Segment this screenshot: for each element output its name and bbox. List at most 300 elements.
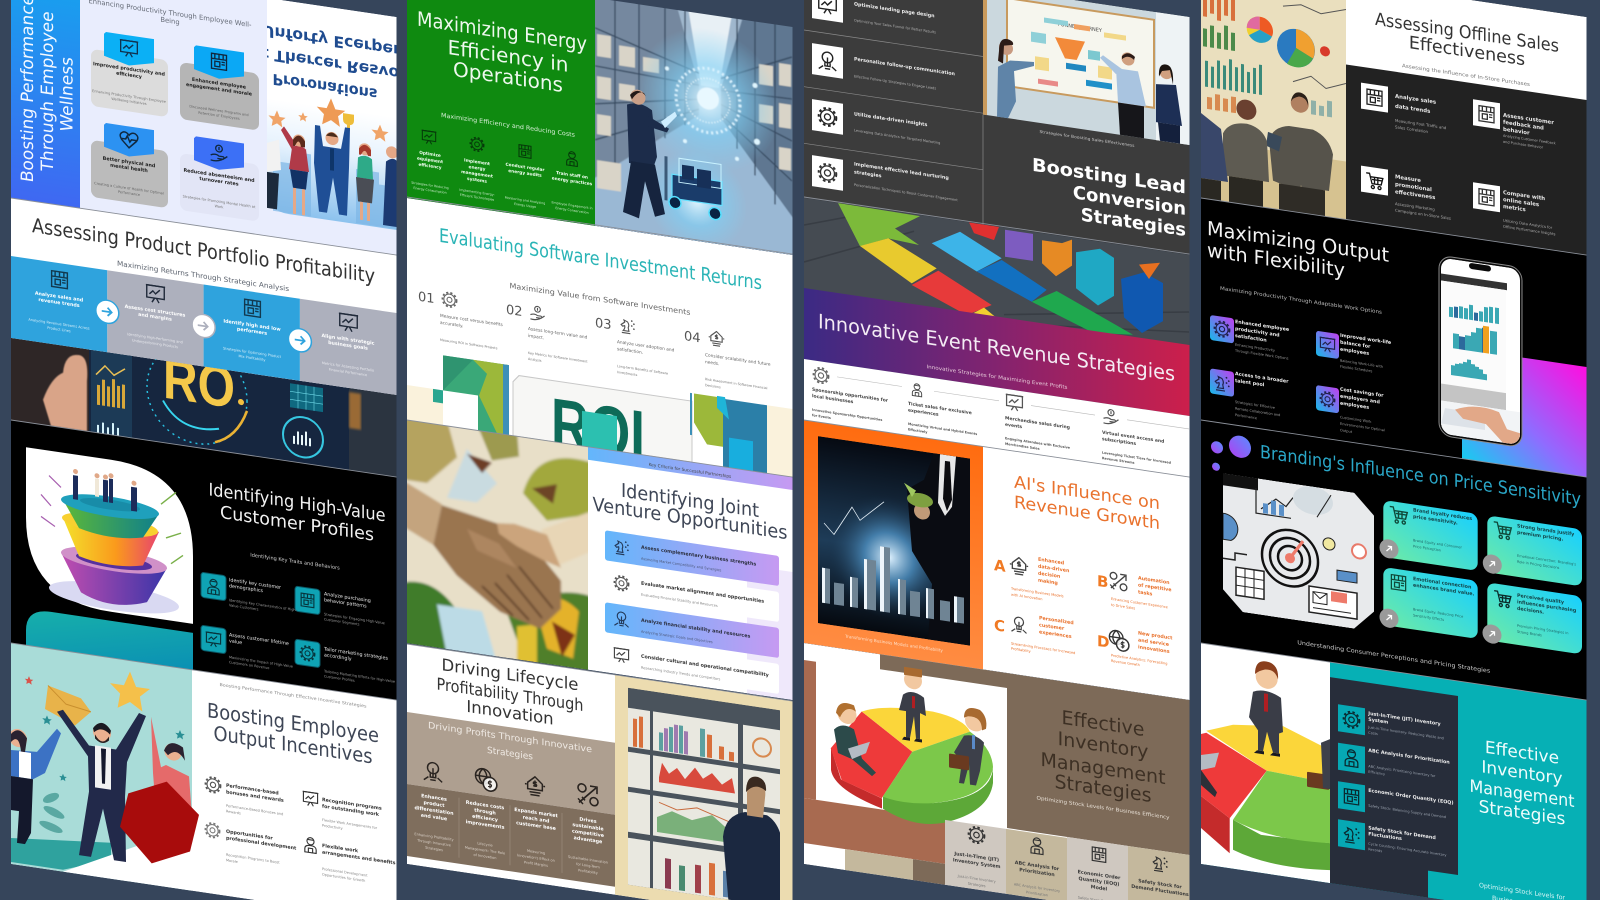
band: driving profits: reach and [523, 815, 550, 825]
slide: evaluating software investment returns [407, 198, 793, 497]
row: revenue ideas: Innovative Sponsorship Opportunities [812, 408, 882, 422]
illustration: man standing on pie chart [1201, 643, 1330, 883]
cards: inventory methods: Strategies [968, 882, 986, 888]
cream frame [615, 675, 792, 900]
row: revenue ideas: experiences [908, 407, 939, 418]
list: incentives: Opportunities for [226, 830, 273, 842]
top gradient strip: Key Criteria for Successful Partnerships [649, 462, 731, 479]
cards: branding effects: Emotional connection [1413, 577, 1471, 591]
band: driving profits: efficiency [472, 814, 499, 824]
title panel: Through Employee [38, 10, 58, 174]
band: driving profits: Drives [579, 818, 597, 825]
list: customer traits: Customer Profiles [324, 674, 355, 683]
title band [804, 288, 1190, 416]
list: flexibility benefits [1210, 313, 1392, 440]
list: flexibility benefits: Strategies for Effective [1235, 400, 1275, 410]
slide: innovative event revenue strategies [804, 197, 1190, 477]
band: driving profits: Innovation's Effect on [517, 853, 555, 863]
row: revenue ideas: events [1005, 422, 1022, 430]
green panel: Strategies for Reducing [411, 181, 449, 190]
list: customer traits: Strategies for Engaging High-Value [324, 612, 385, 625]
list: flexibility benefits: Through Flexible Work Options [1234, 349, 1289, 361]
subtitle: Boosting Performance Through Effective Incentive Strategies [220, 682, 366, 709]
dark list panel: ABC Analysis: Prioritizing Inventory for [1368, 764, 1435, 778]
slide: AI's influence on revenue growth [804, 420, 1190, 700]
subtitle: Being [160, 16, 180, 26]
numbered list: impact. [528, 333, 544, 341]
four-step band: business goals [328, 340, 368, 352]
row: revenue ideas: Merchandise Sales [1005, 442, 1040, 451]
title panel: Wellness [58, 55, 77, 133]
band: driving profits: Lifecycle [477, 841, 493, 848]
lettered list: C [994, 616, 1005, 636]
card: enhanced engagement: Enhanced employee [192, 78, 246, 91]
list: conversion tactics: Implement effective lead nurturing [854, 162, 949, 181]
dark list panel: Efficiency [1368, 770, 1385, 776]
caption: Understanding Consumer Perceptions and Pricing Strategies [1297, 640, 1490, 675]
list: customer traits: value [229, 638, 242, 646]
dark list panel: Cycle Counting: Ensuring Accurate Inventory [1368, 842, 1446, 857]
band: driving profits: Profit Margins [524, 860, 548, 868]
list: offline metrics: behavior [1503, 127, 1530, 137]
title: Boosting Lead [1032, 155, 1186, 199]
cards: branding effects: Brand Equity: Reducing Price [1413, 607, 1463, 619]
cards: inventory methods: Model [1091, 884, 1108, 893]
numbered list: needs. [705, 359, 719, 367]
list: offline metrics: Analyze sales [1395, 94, 1436, 106]
card: reduced dissatisfaction: Strategies for Promoting Mental Health at [183, 194, 255, 209]
list: offline metrics: Compare with [1503, 190, 1545, 202]
list: offline metrics: feedback and [1503, 120, 1544, 132]
list: offline metrics: metrics [1503, 204, 1526, 213]
white title header: Effectiveness [1409, 33, 1525, 70]
list: offline metrics: Campaigns on In-Store Sales [1395, 208, 1451, 221]
four-step band: Analyze sales and [35, 292, 83, 304]
criteria list: Assessing Market Compatibility and Synergies [641, 557, 722, 573]
list: conversion tactics: Optimize landing page design [854, 1, 935, 19]
photo: goal arrows on a floor [804, 197, 1190, 348]
list: flexibility benefits: employees [1340, 401, 1369, 411]
list: flexibility benefits: talent pool [1235, 378, 1265, 388]
slide: driving lifecycle profitability: Innovation [466, 697, 554, 729]
row: revenue ideas: Effectively [908, 427, 928, 434]
numbered list: Key Metrics for Software Investment [528, 351, 588, 364]
photo: handshake over a world map [407, 420, 588, 670]
slide: assessing offline sales effectiveness [1201, 0, 1586, 255]
numbered list: Assess long-term value and [528, 327, 587, 341]
list: conversion tactics: Effective Follow-Up Strategies to Engage Leads [854, 74, 936, 91]
white title header: Assessing the Influence of In-Store Purchases [1402, 63, 1530, 88]
list: offline metrics: Analyzing Customer Feedback [1503, 134, 1556, 145]
dark list panel: Economic Order Quantity (EOQ) [1368, 788, 1454, 806]
white title header: Assessing Offline Sales [1375, 10, 1559, 57]
dark list panel: Just-in-Time (JIT) Inventory [1368, 712, 1441, 727]
list: offline metrics: Utilizing Data Analytics for [1503, 219, 1552, 230]
list: incentives: Morale [226, 858, 238, 864]
list: customer traits: Tailor marketing strategies [324, 647, 388, 662]
band: driving profits: Strategies [487, 746, 533, 763]
list: flexibility benefits: Enhancing Productivity [1235, 343, 1275, 353]
green panel: Monitoring and Analyzing [505, 195, 545, 205]
list: incentives: Recognition programs [322, 798, 382, 812]
numbered list: Analyze user adoption and [617, 340, 674, 354]
title band: Innovative Event Revenue Strategies [818, 309, 1175, 386]
list: customer traits: Assess customer lifetime [229, 633, 289, 647]
list: offline metrics: Offline Performance Insights [1503, 225, 1555, 236]
band: driving profits: sustainable [572, 822, 604, 833]
brown title panel: Effective [1062, 706, 1144, 741]
four-step band: Product Lines [47, 326, 71, 333]
green panel: Operations [453, 57, 563, 97]
four-step band: Assess cost structures [125, 305, 185, 319]
slide: effective inventory management strategies (teal): Strategies [1479, 797, 1565, 830]
list: conversion tactics [804, 0, 983, 224]
list: customer traits: Identify key customer [229, 578, 281, 591]
cards: branding effects: Strong Brands [1517, 630, 1542, 637]
list: flexibility benefits: Customizing Work [1340, 415, 1371, 424]
slide: boosting employee output incentives [9, 643, 396, 900]
criteria list: Analyze financial stability and resources [641, 618, 751, 640]
row: revenue ideas: Merchandise sales during [1005, 416, 1070, 431]
photo: ROI dashboard: RO [163, 346, 235, 421]
lettered list: D [1097, 632, 1109, 652]
numbered list: Measure cost versus benefits [440, 314, 503, 328]
card: better health [91, 121, 168, 208]
numbered list: Investments [617, 370, 638, 377]
flipped title panel: Unforty Ecerpen [262, 21, 404, 60]
leaf illustration: layered funnel [26, 447, 193, 624]
list: flexibility benefits: balance for [1340, 340, 1371, 350]
numbered list: Measuring ROI in Software Projects [440, 338, 498, 350]
list: conversion tactics: strategies [854, 169, 882, 179]
numbered list: Long-term Benefits of Software [617, 364, 668, 376]
subtitle: Maximizing Value from Software Investments [509, 281, 691, 317]
numbered list: 01 [418, 290, 435, 307]
lettered list: New product [1138, 631, 1172, 642]
row: revenue ideas: Virtual event access and [1102, 431, 1164, 445]
slide: assessing product portfolio profitability [11, 198, 397, 477]
list: customer traits: demographics [229, 583, 264, 594]
list: offline metrics: Measure [1395, 174, 1421, 184]
slide: effective inventory management strategies (brown) [804, 643, 1190, 900]
criteria list: Consider cultural and operational compatibility [641, 654, 770, 679]
green panel: energy [469, 164, 486, 173]
criteria list: Assess complementary business strengths [641, 545, 756, 568]
illustration: team with star and hexagon [9, 643, 199, 892]
list: incentives: Performance-Based Bonuses and [226, 804, 283, 816]
illustration: ROI document: ROI [551, 383, 645, 475]
slide: driving lifecycle profitability [407, 644, 792, 900]
list: incentives: professional development [226, 835, 297, 852]
dark list panel: Safety Stock for Demand [1368, 826, 1436, 841]
brown title panel: Inventory [1058, 727, 1148, 763]
green panel: energy practices [552, 175, 593, 187]
green panel: efficiency [418, 162, 442, 171]
row: revenue ideas: Sponsorship opportunities for [812, 388, 888, 404]
band: driving profits: Expands market [514, 808, 558, 819]
card: better health: Better physical and [103, 157, 155, 169]
flipped title panel: t Thercer Resvoi [261, 44, 405, 83]
band: driving profits: Driving Profits Through Innovative [428, 721, 592, 755]
list: flexibility benefits: satisfaction [1235, 333, 1267, 344]
list: offline metrics: Assess customer [1503, 113, 1554, 126]
subtitle: Maximizing Productivity Through Adaptable Work Options [1220, 286, 1382, 316]
row: revenue ideas: Revenue Streams [1102, 456, 1135, 465]
cards: inventory methods: Inventory System [953, 857, 1001, 870]
list: flexibility benefits: Improved work-life [1340, 334, 1391, 346]
green panel: energy audits [508, 168, 542, 179]
numbered list: Decisions [705, 383, 721, 389]
lettered list [994, 550, 1173, 675]
list: flexibility benefits: Environments for Optimal [1340, 422, 1385, 432]
row: revenue ideas: Leveraging Ticket Tiers for Increased [1102, 451, 1171, 465]
illustration: ROI document [407, 355, 792, 476]
lettered list: Enhancing Customer Experience [1111, 597, 1168, 609]
column 4 of slides [1201, 0, 1586, 900]
list: flexibility benefits: Output [1340, 428, 1353, 434]
four-step band: Mix Profitability [239, 354, 265, 362]
cards: inventory methods: ABC Analysis for [1015, 861, 1059, 872]
lettered list: and service [1138, 637, 1170, 648]
numbered list: 04 [684, 329, 701, 346]
dark list panel: ABC Analysis for Prioritization [1368, 748, 1450, 766]
list: offline metrics: and Purchase Behavior [1503, 140, 1544, 150]
band: driving profits: differentiation [415, 805, 454, 817]
criteria list: Analyzing Strategic Goals and Objectives [641, 630, 713, 644]
slide: identifying high-value customer profiles [11, 420, 396, 702]
card: reduced dissatisfaction [182, 136, 256, 208]
lettered list: B [1097, 572, 1108, 592]
band: driving profits: product [423, 800, 445, 809]
arrow circles [96, 299, 311, 353]
lettered list: of repetitive [1138, 582, 1172, 593]
green panel: Energy Conservation [555, 206, 589, 215]
list: customer traits: Value Customers [229, 603, 259, 612]
cards: branding effects: Price Perception [1413, 544, 1441, 553]
list: flexibility benefits: Flexible Schedules [1340, 365, 1372, 373]
cards: inventory methods: Economic Order [1078, 870, 1120, 882]
list: customer traits: Maximizing the Impact of High-Value [229, 655, 293, 669]
slide: effective inventory management strategies (teal) [1201, 643, 1586, 900]
band: driving profits: Enhances [421, 794, 447, 803]
slide: boosting employee output incentives: Output Incentives [214, 721, 373, 768]
list: incentives: bonuses and rewards [226, 789, 284, 804]
list: flexibility benefits: Enhanced employee [1235, 320, 1289, 333]
column 3 of slides [804, 0, 1190, 900]
band: driving profits: improvements [466, 819, 505, 831]
card: better health: mental health [110, 163, 148, 174]
list: incentives: Performance-based [226, 784, 279, 797]
slide: identifying joint venture opportunities: Venture Opportunities [593, 493, 788, 544]
card: improved productivity: efficiency [116, 71, 143, 80]
photo: team at funnel whiteboard [983, 0, 1190, 145]
title band: Innovative Strategies for Maximizing Event Profits [926, 364, 1068, 391]
cards: branding effects: Premium Pricing Strategies in [1517, 624, 1568, 635]
lettered list: data-driven [1038, 564, 1070, 574]
band: driving profits: for Long-Term [576, 862, 600, 870]
four-step band: Metrics for Assessing Portfolio [322, 361, 374, 373]
card: enhanced engagement: Discussed Wellness Programs and [189, 104, 249, 117]
list: customer traits: Customer Segments [324, 617, 360, 627]
list: customer traits [201, 572, 395, 689]
list: conversion tactics: Personalization Techniques to Boost Customer Engagement [854, 183, 958, 202]
lettered list: Transforming Business Models [1011, 587, 1064, 598]
list: incentives [205, 776, 396, 887]
list: offline metrics: Assessing Marketing [1395, 201, 1435, 212]
teal shape [26, 608, 193, 672]
slide: maximizing output with flexibility: with Flexibility [1207, 239, 1345, 282]
numbered list: Analysis [528, 357, 542, 363]
green panel: Maximizing Energy [417, 7, 587, 56]
title: Maximizing Output [1207, 217, 1389, 267]
row: revenue ideas: Monetizing Virtual and Hybrid Events [908, 422, 977, 436]
title: Assessing Product Portfolio Profitability [32, 213, 375, 288]
lettered list: with AI Innovation [1011, 593, 1042, 601]
list: incentives: Rewards [226, 809, 241, 816]
list: offline metrics [1361, 83, 1557, 237]
photo: analyst viewing dashboards [628, 688, 783, 900]
dark list panel: Safety Stock: Balancing Supply and Demand [1368, 804, 1446, 819]
subtitle: Maximizing Returns Through Strategic Analysis [117, 259, 289, 293]
title: Identifying High-Value [208, 480, 385, 526]
band: driving profits: Management: The Role [465, 846, 505, 856]
column 2 of slides [401, 0, 802, 900]
cards: inventory methods: Safety Stock for [1138, 879, 1182, 891]
four-step band: Analyzing Revenue Streams Across [28, 318, 90, 331]
lettered list: Streamlining Processes for Increased [1011, 642, 1075, 655]
photo: smart warehouse [595, 0, 792, 255]
band: driving profits: Strategies [425, 846, 443, 852]
criteria list: Evaluating Financial Stability and Resources [641, 593, 718, 608]
lettered list: making [1038, 578, 1058, 587]
dark list panel: Records [1368, 847, 1382, 853]
cards: branding effects: Brand loyalty reduces [1413, 508, 1472, 522]
row: revenue ideas: subscriptions [1102, 436, 1136, 447]
green panel: Implement [464, 158, 490, 167]
card: improved productivity: Wellbeing Initiatives [111, 97, 147, 106]
green panel: Energy Usage [514, 202, 536, 209]
cards: inventory methods: Prioritization [1019, 867, 1055, 878]
list: offline metrics: online sales [1503, 197, 1539, 208]
four-step band: Identifying High-Performing and [127, 332, 183, 344]
gradient panel [1462, 349, 1586, 477]
slide: driving lifecycle profitability: Profitability Through [436, 674, 584, 715]
four-step band: revenue trends [38, 297, 80, 309]
photo: team reviewing charts [1201, 0, 1346, 219]
numbered list: Consider scalability and future [705, 353, 771, 368]
green panel: Conduct regular [506, 163, 544, 173]
band: driving profits: advantage [574, 835, 603, 846]
four-step band: Underperforming Products [132, 338, 178, 349]
lettered list: Predictive Analytics: Forecasting [1111, 653, 1167, 666]
slide: boosting performance through employee wellness [11, 0, 405, 256]
title: Evaluating Software Investment Returns [439, 224, 762, 295]
list: flexibility benefits: Access to a broader [1235, 372, 1288, 385]
four-step band [11, 256, 396, 395]
four-step band: Align with strategic [321, 334, 375, 347]
decorative dots [1211, 431, 1251, 476]
green panel: equipment [417, 155, 443, 165]
list: incentives: Productivity [322, 824, 343, 831]
lettered list: A [994, 556, 1006, 576]
green panel: Implementing Energy- [459, 188, 495, 197]
four-step band: Strategies for Optimizing Product [223, 346, 281, 359]
numbered list [418, 292, 770, 390]
photo: marketing icon sketches [1223, 473, 1374, 632]
list: incentives: for outstanding work [322, 804, 380, 818]
list: offline metrics: promotional [1395, 182, 1432, 193]
cards: inventory methods: Quantity (EOQ) [1079, 876, 1119, 888]
cards: branding effects: price sensitivity. [1413, 514, 1458, 526]
card: better health: Performance [118, 190, 140, 197]
cards: inventory methods: Demand Fluctuations [1131, 884, 1189, 898]
card: enhanced engagement [180, 43, 259, 131]
list: incentives: Flexible work [322, 844, 358, 854]
brown title panel: Optimizing Stock Levels for Business Efficiency [1037, 795, 1170, 821]
list: offline metrics: Measuring Foot Traffic and [1395, 118, 1446, 130]
title: Identifying Joint [621, 479, 759, 522]
list: incentives: Flexible Work Arrangements for [322, 818, 377, 830]
decorative blocks [804, 660, 945, 885]
list: customer traits: accordingly [324, 652, 352, 662]
card: enhanced engagement: engagement and morale [186, 82, 253, 98]
cards: branding effects: premium pricing. [1517, 530, 1563, 543]
subtitle: Identifying Key Traits and Behaviors [250, 552, 340, 572]
list: customer traits: Tailoring Marketing Efforts for High-Value [324, 669, 395, 684]
top gradient strip [588, 447, 792, 490]
white title header [1346, 0, 1586, 100]
orange panel with photo: Transforming Business Models and Profitability [844, 633, 943, 653]
numbered list: Risk Assessment in Software Financial [705, 377, 767, 390]
subtitle: Strategies for Boosting Sales Effectiveness [1040, 129, 1135, 148]
list: incentives: Opportunities for Growth [322, 873, 365, 883]
band: driving profits: customer base [516, 820, 557, 832]
green panel: Train staff on [556, 171, 588, 181]
lettered list: Profitability [1011, 647, 1031, 654]
lettered list: tasks [1138, 589, 1153, 598]
card: better health: Creating a Culture of Health for Optimal [94, 181, 164, 196]
lettered list: Automation [1138, 576, 1170, 586]
title: AI's Influence on [1014, 473, 1160, 514]
card: enhanced engagement: Retention of Employees [198, 111, 240, 121]
brown title panel: Strategies [1055, 770, 1152, 807]
slide: effective inventory management strategies (teal): Management [1470, 777, 1575, 812]
cards: inventory methods: ABC Analysis for Inventory [1014, 882, 1060, 893]
slide: AI's influence on revenue growth: Revenue Growth [1014, 493, 1160, 534]
slide: maximizing output with flexibility [1201, 198, 1586, 477]
row: revenue ideas: for Events [812, 413, 831, 420]
numbered list: accurately. [440, 320, 463, 329]
list: customer traits: Customers on Revenue [229, 660, 269, 670]
list: conversion tactics: Optimizing Your Sales Funnel for Better Results [854, 18, 936, 35]
slide: boosting lead conversion strategies: Strategies [1081, 205, 1186, 241]
cards: branding effects: enhances brand value. [1413, 582, 1474, 598]
list: flexibility benefits: Remote Collaboration and [1235, 407, 1280, 417]
numbered list: satisfaction. [617, 346, 643, 356]
list: flexibility benefits: employers and [1340, 394, 1380, 406]
green panel: Employee Engagement in [551, 200, 593, 210]
band: driving profits: Through Innovative [416, 838, 451, 847]
cards: branding effects: Emotional Connection: Branding's [1517, 554, 1576, 567]
lettered list: innovations [1138, 644, 1170, 655]
row: revenue ideas: local businesses [812, 393, 854, 405]
band: driving profits: Sustainable Innovation [568, 855, 608, 865]
cards: branding effects: Sensitivity Effects [1413, 613, 1444, 622]
band: driving profits: and value [421, 813, 448, 823]
dark list panel [1330, 677, 1458, 900]
slide: boosting lead conversion strategies [804, 0, 1190, 255]
green panel: Efficient Technologies [460, 193, 495, 202]
